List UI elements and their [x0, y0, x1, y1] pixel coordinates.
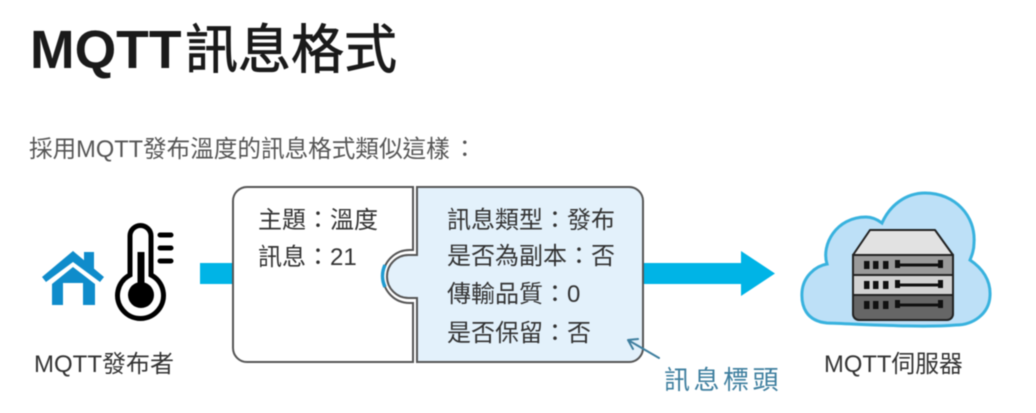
arrow: message to broker — [642, 251, 775, 296]
panel: message header — [383, 187, 643, 362]
icon: cloud — [802, 193, 990, 326]
intro text: 採用MQTT發布溫度的訊息格式類似這樣 — [29, 136, 450, 163]
header fields: 訊息類型：發布 — [447, 207, 615, 234]
header fields: 是否為副本：否 — [447, 243, 615, 270]
publisher group — [34, 226, 174, 378]
intro text: ： — [453, 137, 477, 163]
arrow: publisher to message — [200, 263, 233, 284]
payload message: 訊息：21 — [258, 244, 357, 271]
icon: server rack — [853, 230, 953, 320]
icon: thermometer — [118, 226, 171, 318]
broker label: MQTT伺服器 — [824, 351, 963, 378]
publisher label: MQTT發布者 — [34, 351, 174, 378]
connector highlight — [383, 265, 385, 287]
callout arrow — [628, 339, 659, 358]
icon: house — [42, 251, 104, 305]
title: 訊息格式 — [185, 21, 397, 80]
knob seam cover — [414, 256, 420, 297]
panel: message payload — [233, 187, 413, 362]
header fields: 傳輸品質：0 — [447, 281, 580, 308]
header fields — [447, 207, 615, 347]
broker group — [802, 193, 990, 378]
callout: message header: 訊息標頭 — [664, 365, 782, 395]
header fields: 是否保留：否 — [447, 320, 591, 347]
title: MQTT — [30, 21, 182, 80]
payload topic: 主題：溫度 — [258, 207, 378, 234]
